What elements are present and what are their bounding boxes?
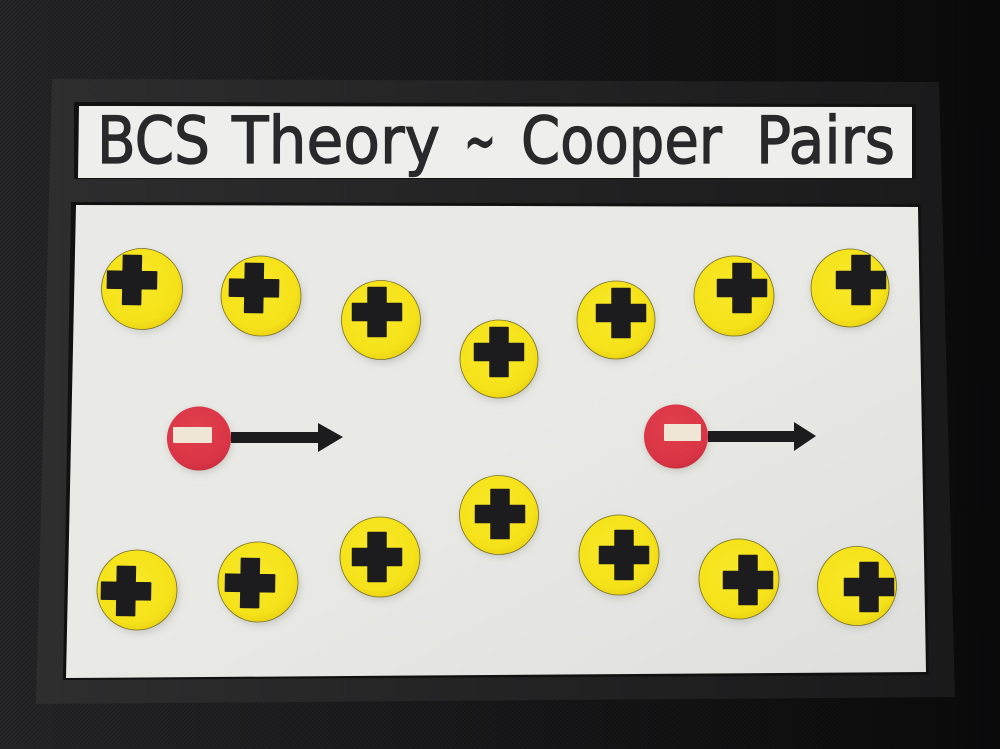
ion 10 bbox=[340, 517, 421, 600]
panel: title bbox=[74, 102, 916, 179]
ion 8 bbox=[97, 550, 179, 633]
heading: Pairs bbox=[756, 104, 895, 179]
ion 7 bbox=[811, 249, 889, 330]
arrow bbox=[708, 422, 816, 451]
ion 1 bbox=[102, 248, 184, 332]
ion 3 bbox=[342, 280, 423, 363]
ion 12 bbox=[579, 515, 659, 598]
ion 14 bbox=[818, 546, 896, 628]
minus sign bbox=[664, 424, 701, 441]
electron: left with arrow bbox=[167, 406, 343, 473]
ions: top row bbox=[102, 248, 889, 401]
panel: main board bbox=[63, 202, 929, 680]
ion 9 bbox=[218, 542, 300, 625]
frame: black plaque border bbox=[36, 79, 955, 704]
ions: bottom row bbox=[97, 476, 896, 633]
ion 2 bbox=[221, 256, 303, 339]
ion 5 bbox=[577, 281, 655, 362]
heading: Theory bbox=[231, 104, 440, 179]
ion 6 bbox=[694, 256, 774, 339]
heading: ~ bbox=[464, 104, 496, 179]
heading: BCS bbox=[97, 104, 210, 179]
heading bbox=[97, 104, 895, 179]
heading: Cooper bbox=[521, 104, 722, 179]
minus sign bbox=[173, 427, 212, 443]
electron: right with arrow bbox=[644, 404, 816, 471]
ion 4 bbox=[460, 320, 539, 401]
ion 11 bbox=[460, 476, 539, 557]
arrow bbox=[231, 423, 343, 452]
ion 13 bbox=[699, 539, 779, 622]
